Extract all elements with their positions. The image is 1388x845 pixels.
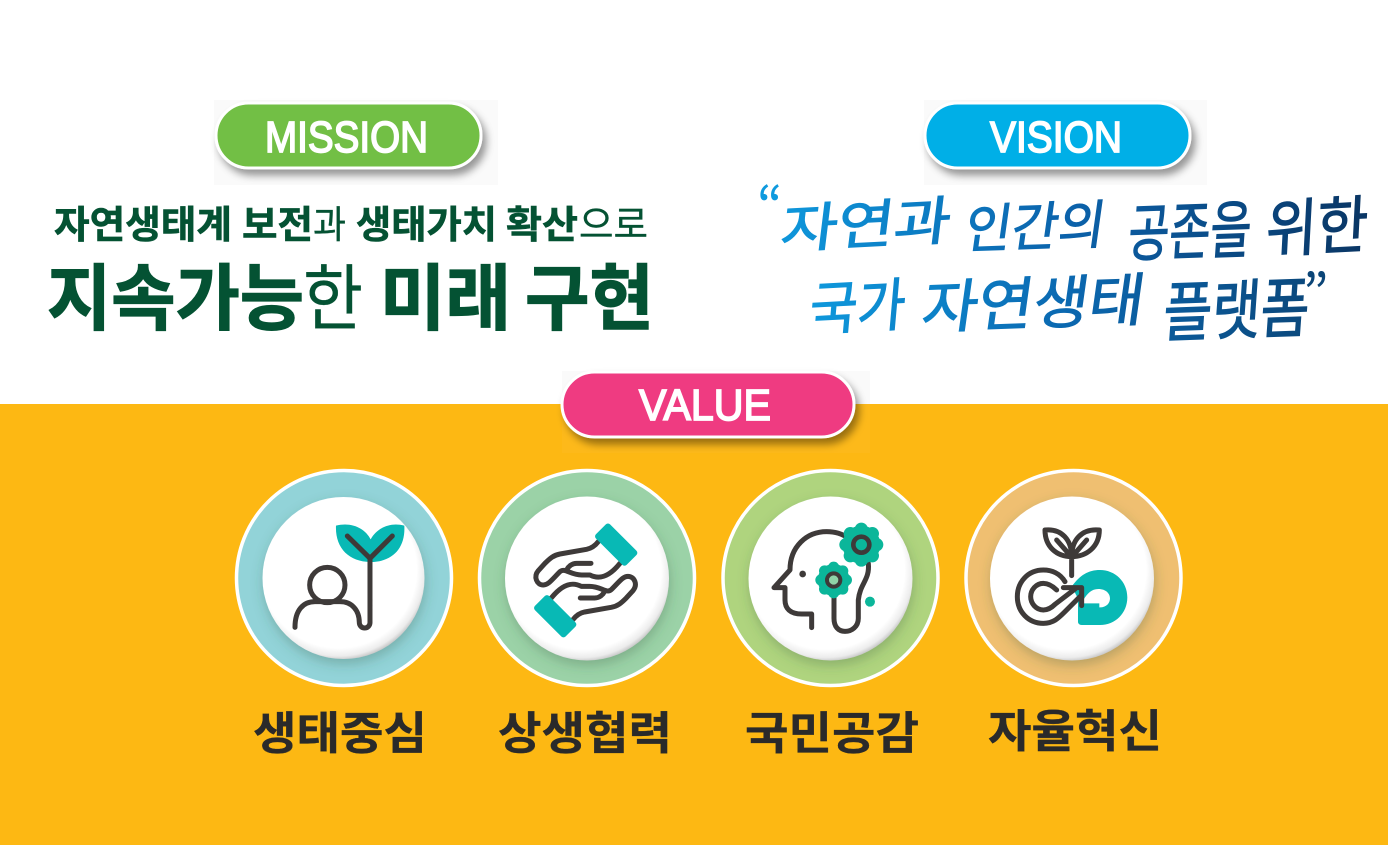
mission subheading [54, 194, 648, 249]
panel: mission [47, 100, 654, 345]
panel: vision [757, 100, 1371, 355]
mission subheading: 으로 [579, 194, 648, 249]
value item: public empathy [723, 470, 938, 762]
mission subheading: 자연생태계 [54, 194, 232, 249]
mission subheading: 과 [313, 194, 346, 249]
mission main heading: 구현 [525, 240, 654, 345]
mission badge [214, 100, 498, 185]
vision statement: 위한 [1264, 175, 1371, 271]
vision statement [757, 163, 1371, 355]
mission main heading: 미래 [380, 240, 511, 345]
value badge: VALUE [639, 381, 771, 430]
icon: two hands [533, 522, 639, 639]
value item: autonomous innovation [966, 470, 1181, 760]
vision statement: 플랫폼 [1161, 256, 1313, 355]
value badge [562, 371, 870, 453]
mission main heading: 지속가능 [47, 240, 304, 345]
mission subheading: 생태가치 [356, 194, 497, 249]
value item: coexistence [480, 470, 694, 762]
vision badge [924, 100, 1207, 185]
icon: sprout with infinity arrow [1017, 530, 1127, 625]
vision statement: 공존을 [1126, 180, 1255, 275]
mission main heading [47, 240, 654, 345]
value item: ecology-centered [236, 470, 452, 762]
background band [0, 404, 1388, 845]
vision badge: VISION [990, 113, 1122, 162]
panel: value [236, 371, 1181, 762]
vision statement: ” [1303, 250, 1329, 329]
vision statement: 자연생태 [918, 253, 1151, 345]
vision statement: 국가 [807, 258, 910, 347]
icon: head with flowers [774, 523, 883, 631]
label: 자율혁신 [988, 695, 1162, 760]
icon: person with sprout [295, 524, 404, 628]
vision statement: 자연과 [777, 178, 956, 263]
mission subheading: 확산 [506, 194, 578, 249]
vision statement: “ [757, 163, 783, 242]
mission main heading: 한 [303, 240, 363, 345]
mission subheading: 보전 [242, 194, 313, 249]
label: 국민공감 [745, 697, 919, 762]
label: 생태중심 [253, 697, 427, 762]
vision statement: 인간의 [961, 182, 1112, 263]
mission badge: MISSION [265, 113, 428, 162]
label: 상생협력 [498, 697, 672, 762]
